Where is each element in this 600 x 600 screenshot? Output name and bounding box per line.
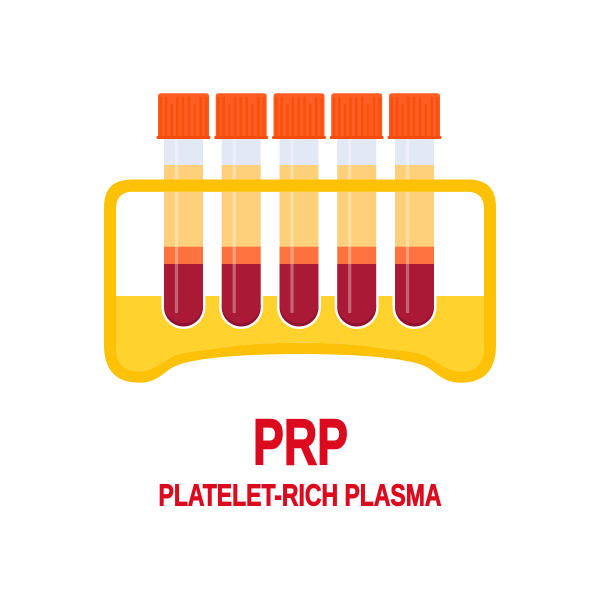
title: PRP: PRP: [253, 407, 348, 479]
tube 1: [162, 139, 206, 329]
test tubes: [162, 139, 436, 329]
test tube rack back bar and frame: [104, 180, 496, 386]
cap 2: [214, 93, 268, 139]
rack front top bar: [132, 180, 468, 192]
subtitle: platelet-rich plasma: PLATELET-RICH PLASMA: [158, 478, 442, 513]
cap 4: [330, 93, 384, 139]
tube 3: [277, 139, 321, 329]
cap 3: [272, 93, 326, 139]
tube 5: [392, 139, 436, 329]
cap 5: [388, 93, 442, 139]
cap 1: [156, 93, 210, 139]
tube caps: [156, 93, 442, 139]
tube 2: [219, 139, 263, 329]
rack liquid fill: [116, 296, 484, 372]
tube 4: [335, 139, 379, 329]
